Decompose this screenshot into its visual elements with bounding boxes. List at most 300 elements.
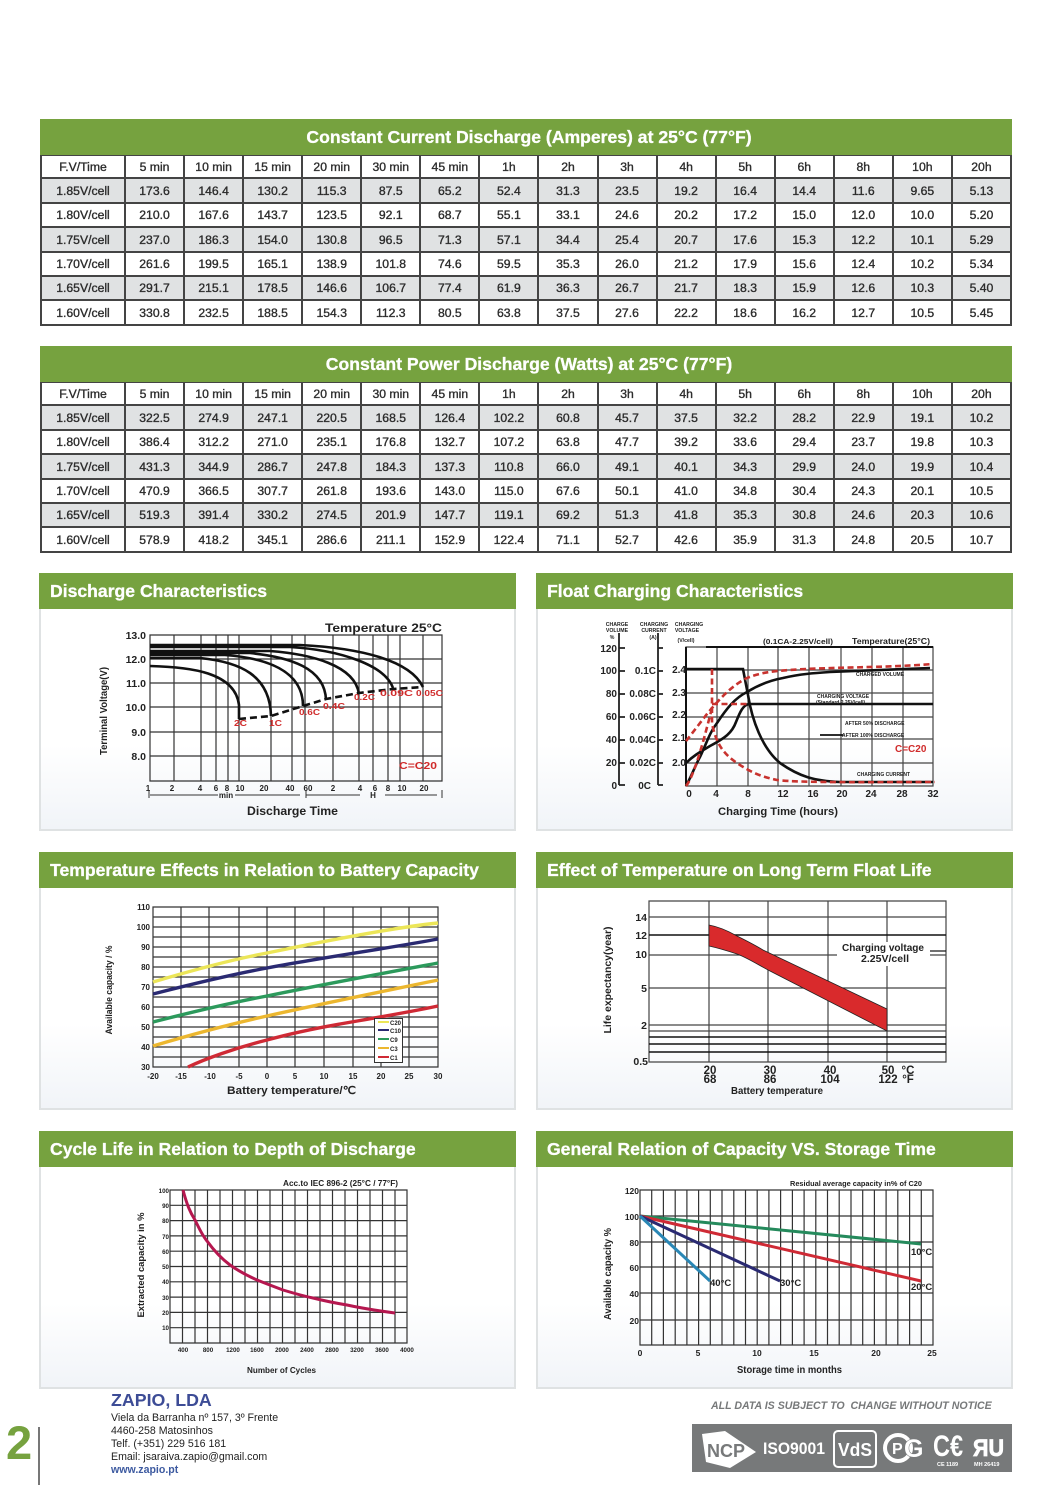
chart: capacity vs temperature: -20 xyxy=(147,1072,159,1081)
table: constant current discharge: 17.2 xyxy=(733,208,757,222)
table: constant current discharge: 15.0 xyxy=(792,208,816,222)
chart: float charging curves: 2.1 xyxy=(672,733,686,744)
heading: constant current discharge: Constant Current Discharge (Amperes) at 25°C (77°F) xyxy=(306,127,752,147)
logo: ISO9001: ISO9001 xyxy=(763,1439,825,1458)
table: constant current discharge xyxy=(40,155,1012,326)
table: constant power discharge: 40.1 xyxy=(674,460,698,474)
table: constant power discharge: 24.8 xyxy=(851,532,875,546)
table: constant current discharge: 8h xyxy=(856,160,870,174)
chart: float charging curves: 20 xyxy=(606,758,617,769)
chart: float charging curves: 24 xyxy=(865,789,877,800)
legend: C20 xyxy=(390,1021,402,1027)
chart: discharge curves: Terminal Voltage(V) xyxy=(99,667,110,755)
table: constant power discharge: 34.8 xyxy=(733,484,757,498)
table: constant power discharge: 143.0 xyxy=(435,484,465,498)
table: constant power discharge: 1.65V/cell xyxy=(56,508,110,522)
company contact block: Viela da Barranha nº 157, 3º Frente xyxy=(111,1412,278,1424)
chart: cycle life curve: 3200 xyxy=(350,1347,364,1354)
chart: capacity vs temperature: -10 xyxy=(204,1072,216,1081)
table: constant power discharge: 30.8 xyxy=(792,508,816,522)
chart: discharge curves: 2 xyxy=(331,784,336,793)
table: constant current discharge: 20h xyxy=(971,160,992,174)
table: constant power discharge: 23.7 xyxy=(851,435,875,449)
chart: float life vs temperature: 2.25V/cell xyxy=(861,953,909,965)
table: constant power discharge: 71.1 xyxy=(556,532,580,546)
table: constant power discharge: 1.75V/cell xyxy=(56,460,110,474)
chart: cycle life curve: Number of Cycles xyxy=(247,1365,316,1375)
table: constant current discharge: 165.1 xyxy=(257,257,288,271)
table: constant current discharge: 5 min xyxy=(140,160,169,174)
table: constant current discharge: 167.6 xyxy=(198,208,229,222)
table: constant power discharge: 3h xyxy=(620,386,634,400)
chart: discharge curves: 2C xyxy=(234,719,247,728)
chart: float charging curves: 0.08C xyxy=(629,689,656,700)
chart: discharge curves: 8.0 xyxy=(131,751,146,763)
table: constant current discharge: 14.4 xyxy=(792,184,816,198)
table: constant current discharge: 154.0 xyxy=(257,232,288,246)
table: constant power discharge: 193.6 xyxy=(376,484,406,498)
table: constant current discharge: 33.1 xyxy=(556,208,580,222)
table: constant current discharge: 20.2 xyxy=(674,208,698,222)
chart: discharge curves: 1 xyxy=(146,784,151,793)
table: constant power discharge: 10.7 xyxy=(970,532,993,546)
chart: storage time lines: 40 xyxy=(630,1289,639,1299)
table: constant power discharge: 322.5 xyxy=(139,410,170,424)
chart: float charging curves: 2.3 xyxy=(672,688,686,699)
chart: float life vs temperature: 2 xyxy=(641,1020,647,1032)
table: constant current discharge: 115.3 xyxy=(317,184,347,198)
chart: float charging curves: 80 xyxy=(606,689,617,700)
chart: capacity vs temperature: 90 xyxy=(141,943,151,952)
table: constant power discharge: 49.1 xyxy=(615,460,639,474)
chart: discharge curves: 20 xyxy=(260,784,269,793)
table: constant power discharge: 168.5 xyxy=(376,410,406,424)
chart: float life vs temperature: Life expectancy(year) xyxy=(602,926,614,1034)
chart: float charging curves: 2.0 xyxy=(672,758,686,769)
chart: float charging curves: (A) xyxy=(649,635,657,641)
chart: float life vs temperature: 122 xyxy=(878,1074,898,1086)
table: constant current discharge: 10h xyxy=(912,160,933,174)
table: constant power discharge: 39.2 xyxy=(674,435,698,449)
logo: VdS: VdS xyxy=(838,1440,872,1460)
chart: float charging curves: 0 xyxy=(611,781,617,792)
table: constant power discharge: 119.1 xyxy=(494,508,524,522)
table: constant power discharge: 1.85V/cell xyxy=(56,410,110,424)
table: constant current discharge: 17.6 xyxy=(733,232,757,246)
chart: storage time lines: 20 xyxy=(871,1348,881,1358)
chart: float charging curves: 2.4 xyxy=(672,665,686,676)
table: constant power discharge: 307.7 xyxy=(257,484,288,498)
legend: C3 xyxy=(390,1047,398,1053)
chart: float charging curves: 40 xyxy=(606,735,617,746)
table: constant current discharge: 10 min xyxy=(195,160,232,174)
chart: float charging curves: AFTER 100% DISCHARGE xyxy=(842,733,905,739)
table: constant power discharge: 6h xyxy=(797,386,811,400)
table: constant power discharge: 132.7 xyxy=(435,435,465,449)
chart: capacity vs temperature: 80 xyxy=(141,963,151,972)
table: constant current discharge: 1.60V/cell xyxy=(56,306,110,320)
panel: discharge characteristics xyxy=(39,573,516,831)
logo: PG xyxy=(885,1435,923,1463)
panel: capacity vs storage time: General Relation of Capacity VS. Storage Time xyxy=(547,1139,936,1159)
legend: C1 xyxy=(390,1056,398,1062)
chart: cycle life curve xyxy=(136,1179,414,1375)
chart: capacity vs temperature: 15 xyxy=(349,1072,358,1081)
panel: float life: Effect of Temperature on Long Term Float Life xyxy=(547,860,931,880)
table: constant power discharge: 35.3 xyxy=(733,508,757,522)
table: constant power discharge: 41.0 xyxy=(674,484,698,498)
chart: cycle life curve: 2800 xyxy=(325,1347,339,1354)
company contact block: Email: jsaraiva.zapio@gmail.com xyxy=(111,1451,267,1463)
table: constant current discharge: 74.6 xyxy=(438,257,462,271)
chart: discharge curves: 1C xyxy=(269,719,282,728)
table: constant current discharge: 4h xyxy=(679,160,693,174)
legend: C9 xyxy=(390,1038,398,1044)
chart: capacity vs temperature: 50 xyxy=(141,1023,151,1032)
certification logos strip xyxy=(692,1424,1012,1472)
table: constant power discharge: 10.5 xyxy=(970,484,993,498)
table: constant current discharge: 80.5 xyxy=(438,306,462,320)
table: constant power discharge: 50.1 xyxy=(615,484,639,498)
chart: capacity vs temperature: 30 xyxy=(141,1063,151,1072)
company contact block: www.zapio.pt xyxy=(111,1464,178,1476)
chart: capacity vs temperature: Battery temperature/℃ xyxy=(227,1085,356,1097)
chart: float charging curves: CHARGING xyxy=(675,622,703,628)
table: constant power discharge: 102.2 xyxy=(494,410,524,424)
table: constant power discharge: 5 min xyxy=(140,386,169,400)
table: constant power discharge: 34.3 xyxy=(733,460,757,474)
logo: CE: C€ xyxy=(933,1430,963,1463)
table: constant power discharge: 33.6 xyxy=(733,435,757,449)
table: constant current discharge: 146.4 xyxy=(198,184,229,198)
legend xyxy=(374,1018,402,1062)
chart: discharge curves: 10 xyxy=(398,784,407,793)
chart: float charging curves: (Standard 2.25V/cell) xyxy=(816,700,866,706)
table: constant power discharge: 51.3 xyxy=(615,508,639,522)
table: constant current discharge: 15.3 xyxy=(792,232,816,246)
table: constant power discharge: 271.0 xyxy=(257,435,288,449)
table: constant power discharge: 1.60V/cell xyxy=(56,532,110,546)
chart: float life vs temperature: 86 xyxy=(764,1074,776,1086)
chart: capacity vs temperature: 5 xyxy=(293,1072,298,1081)
table: constant current discharge: 199.5 xyxy=(198,257,229,271)
heading: constant power discharge xyxy=(40,346,1012,382)
panel: temperature effects: Temperature Effects in Relation to Battery Capacity xyxy=(50,860,479,880)
table: constant current discharge: 6h xyxy=(797,160,811,174)
table: constant power discharge: 24.0 xyxy=(851,460,875,474)
panel: discharge characteristics: Discharge Characteristics xyxy=(50,581,267,601)
table: constant power discharge: 274.5 xyxy=(316,508,347,522)
chart: cycle life curve: 4000 xyxy=(400,1347,414,1354)
table: constant power discharge: 184.3 xyxy=(376,460,406,474)
logo: PG: P xyxy=(892,1441,903,1458)
chart: storage time lines xyxy=(603,1179,937,1376)
table: constant power discharge: 20h xyxy=(971,386,992,400)
chart: discharge curves: Temperature 25°C xyxy=(325,621,442,635)
table: constant current discharge: 186.3 xyxy=(198,232,229,246)
chart: storage time lines: 20°C xyxy=(911,1282,932,1293)
chart: float life vs temperature: 104 xyxy=(820,1074,840,1086)
table: constant power discharge: 22.9 xyxy=(851,410,875,424)
chart: storage time lines: 10 xyxy=(752,1348,762,1358)
table: constant power discharge: 30 min xyxy=(372,386,409,400)
chart: cycle life curve: Acc.to IEC 896-2 (25°C / 77°F) xyxy=(283,1179,398,1188)
table: constant current discharge: 21.2 xyxy=(674,257,698,271)
table: constant current discharge: 237.0 xyxy=(139,232,170,246)
chart: float charging curves: VOLTAGE xyxy=(675,628,700,634)
table: constant power discharge: 1h xyxy=(502,386,516,400)
chart: storage time lines: 15 xyxy=(809,1348,819,1358)
panel: cycle life: Cycle Life in Relation to Depth of Discharge xyxy=(50,1139,416,1159)
table: constant power discharge: 42.6 xyxy=(674,532,698,546)
chart: float charging curves: AFTER 50% DISCHARGE xyxy=(845,721,905,727)
chart: discharge curves: 40 xyxy=(286,784,295,793)
table: constant power discharge: 20.5 xyxy=(910,532,934,546)
table: constant power discharge: 30.4 xyxy=(792,484,816,498)
table: constant current discharge: 291.7 xyxy=(139,281,170,295)
table: constant power discharge: 286.6 xyxy=(316,532,347,546)
table: constant power discharge: 107.2 xyxy=(494,435,524,449)
chart: float charging curves: 0.02C xyxy=(629,758,656,769)
chart: discharge curves: 10 xyxy=(236,784,245,793)
chart: float charging curves: (0.1CA-2.25V/cell) xyxy=(763,637,834,646)
chart: float charging curves: Charging Time (hours) xyxy=(718,806,838,818)
table: constant power discharge: 345.1 xyxy=(257,532,288,546)
table: constant current discharge: 12.0 xyxy=(851,208,875,222)
chart: float life vs temperature: 10 xyxy=(635,949,647,961)
table: constant power discharge: 28.2 xyxy=(792,410,816,424)
table: constant current discharge: 215.1 xyxy=(198,281,229,295)
table: constant current discharge: 143.7 xyxy=(257,208,288,222)
chart: float charging curves: 28 xyxy=(896,789,908,800)
chart: discharge curves: min xyxy=(219,791,233,800)
table: constant current discharge: 45 min xyxy=(432,160,468,174)
table: constant power discharge: 330.2 xyxy=(257,508,288,522)
table: constant current discharge: 1.80V/cell xyxy=(56,208,110,222)
company contact block xyxy=(111,1390,278,1476)
table: constant power discharge: 29.9 xyxy=(792,460,816,474)
table: constant power discharge: 211.1 xyxy=(376,532,406,546)
table: constant current discharge: 5h xyxy=(738,160,752,174)
chart: cycle life curve: 400 xyxy=(178,1347,189,1354)
chart: discharge curves: 0.09C xyxy=(380,689,413,698)
table: constant power discharge: 247.1 xyxy=(257,410,288,424)
table: constant current discharge: 57.1 xyxy=(497,232,521,246)
chart: discharge curves: H xyxy=(370,791,376,800)
table: constant power discharge: 20 min xyxy=(313,386,350,400)
chart: cycle life curve: 2000 xyxy=(275,1347,289,1354)
chart: capacity vs temperature: 70 xyxy=(141,983,151,992)
table: constant power discharge: 115.0 xyxy=(494,484,524,498)
table: constant power discharge: F.V/Time xyxy=(59,386,107,400)
table: constant current discharge: 12.2 xyxy=(851,232,875,246)
table: constant current discharge: 101.8 xyxy=(376,257,406,271)
table: constant current discharge: 18.3 xyxy=(733,281,757,295)
table: constant current discharge: 35.3 xyxy=(556,257,580,271)
table: constant current discharge: 59.5 xyxy=(497,257,521,271)
table: constant power discharge: 10 min xyxy=(195,386,232,400)
chart: storage time lines: 10°C xyxy=(911,1247,932,1258)
table: constant current discharge: 5.20 xyxy=(970,208,993,222)
chart: cycle life curve: 80 xyxy=(162,1218,170,1225)
chart: float charging curves: 4 xyxy=(713,789,719,800)
chart: float charging curves: 20 xyxy=(836,789,848,800)
chart: float charging curves: 2.2 xyxy=(672,710,686,721)
logo: CE: CE 1189 xyxy=(937,1462,958,1468)
table: constant current discharge: 52.4 xyxy=(497,184,521,198)
table: constant power discharge: 126.4 xyxy=(435,410,465,424)
table: constant current discharge: 188.5 xyxy=(257,306,288,320)
table: constant power discharge: 391.4 xyxy=(198,508,229,522)
table: constant power discharge: 10.2 xyxy=(970,410,993,424)
table: constant power discharge: 519.3 xyxy=(139,508,170,522)
chart: float charging curves: 0.1C xyxy=(635,666,656,677)
chart: float charging curves: CHARGING VOLTAGE xyxy=(817,694,870,700)
table: constant power discharge: 31.3 xyxy=(792,532,816,546)
chart: storage time lines: 30°C xyxy=(780,1278,801,1289)
table: constant current discharge: 68.7 xyxy=(438,208,462,222)
chart: discharge curves: 12.0 xyxy=(126,654,146,666)
table: constant current discharge: 130.8 xyxy=(316,232,347,246)
table: constant current discharge: 20 min xyxy=(313,160,350,174)
chart: storage time lines: Residual average capacity in% of C20 xyxy=(790,1179,922,1188)
table: constant current discharge: 17.9 xyxy=(733,257,757,271)
table: constant current discharge: 123.5 xyxy=(316,208,347,222)
table: constant power discharge: 5h xyxy=(738,386,752,400)
table: constant power discharge: 366.5 xyxy=(198,484,229,498)
table: constant current discharge: 55.1 xyxy=(497,208,521,222)
table: constant current discharge: 1.75V/cell xyxy=(56,232,110,246)
chart: storage time lines: Available capacity % xyxy=(603,1228,614,1320)
chart: float life vs temperature: °C xyxy=(902,1065,914,1077)
chart: float charging curves: 100 xyxy=(600,666,617,677)
panel: float charging characteristics: Float Charging Characteristics xyxy=(547,581,803,601)
panel: cycle life xyxy=(39,1131,516,1389)
table: constant power discharge: 2h xyxy=(561,386,575,400)
table: constant current discharge: 5.34 xyxy=(970,257,993,271)
chart: capacity vs temperature: 0 xyxy=(265,1072,270,1081)
chart: float life vs temperature: 0.5 xyxy=(633,1056,648,1068)
table: constant current discharge: 87.5 xyxy=(379,184,403,198)
chart: discharge curves: C=C20 xyxy=(399,760,437,772)
chart: storage time lines: 80 xyxy=(630,1238,639,1248)
chart: float charging curves: CHARGING xyxy=(640,622,668,628)
table: constant current discharge: F.V/Time xyxy=(59,160,107,174)
chart: float charging curves: C=C20 xyxy=(895,744,927,755)
table: constant current discharge: 12.7 xyxy=(851,306,875,320)
chart: discharge curves: 10.0 xyxy=(126,702,146,714)
table: constant current discharge: 37.5 xyxy=(556,306,580,320)
chart: capacity vs temperature: 40 xyxy=(141,1043,151,1052)
table: constant power discharge: 37.5 xyxy=(674,410,698,424)
table: constant current discharge: 330.8 xyxy=(139,306,170,320)
chart: capacity vs temperature: -15 xyxy=(175,1072,187,1081)
table: constant power discharge: 4h xyxy=(679,386,693,400)
table: constant current discharge: 26.0 xyxy=(615,257,639,271)
chart: discharge curves: 20 xyxy=(420,784,429,793)
chart: cycle life curve: 2400 xyxy=(300,1347,314,1354)
table: constant power discharge: 19.9 xyxy=(910,460,934,474)
chart: storage time lines: 5 xyxy=(696,1348,701,1358)
logo: NCP: NCP xyxy=(707,1441,745,1461)
logo: UR: MH 26419 xyxy=(974,1462,999,1468)
chart: cycle life curve: 10 xyxy=(162,1325,170,1332)
chart: cycle life curve: 100 xyxy=(159,1188,170,1195)
table: constant power discharge: 201.9 xyxy=(376,508,406,522)
table: constant current discharge: 92.1 xyxy=(379,208,403,222)
table: constant power discharge: 10.6 xyxy=(970,508,993,522)
heading: constant power discharge: Constant Power Discharge (Watts) at 25°C (77°F) xyxy=(326,354,732,374)
chart: cycle life curve: 60 xyxy=(162,1249,170,1256)
table: constant power discharge: 110.8 xyxy=(494,460,524,474)
chart: discharge curves: 0.2C xyxy=(354,693,375,702)
chart: float life vs temperature: 5 xyxy=(641,983,647,995)
chart: discharge curves: 0.6C xyxy=(299,708,320,717)
chart: cycle life curve: 800 xyxy=(203,1347,214,1354)
chart: float charging curves: CHARGING CURRENT xyxy=(857,772,910,778)
table: constant power discharge: 312.2 xyxy=(198,435,229,449)
chart: cycle life curve: 3600 xyxy=(375,1347,389,1354)
chart: float charging curves: CHARGED VOLUME xyxy=(856,672,905,678)
table: constant current discharge: 15 min xyxy=(254,160,291,174)
chart: storage time lines: 40°C xyxy=(710,1278,731,1289)
table: constant current discharge: 130.2 xyxy=(257,184,288,198)
chart: storage time lines: 0 xyxy=(638,1348,643,1358)
table: constant current discharge: 173.6 xyxy=(139,184,170,198)
table: constant current discharge: 20.7 xyxy=(674,232,698,246)
table: constant current discharge: 1.85V/cell xyxy=(56,184,110,198)
chart: float life vs temperature: 20 xyxy=(704,1065,716,1077)
table: constant power discharge: 8h xyxy=(856,386,870,400)
chart: storage time lines: 120 xyxy=(625,1186,639,1196)
table: constant current discharge: 12.4 xyxy=(851,257,875,271)
panel: temperature effects xyxy=(39,852,516,1110)
table: constant current discharge: 11.6 xyxy=(852,184,875,198)
logo: VdS xyxy=(834,1431,876,1467)
chart: discharge curves xyxy=(99,621,443,818)
table: constant current discharge: 261.6 xyxy=(139,257,170,271)
table: constant current discharge: 5.29 xyxy=(970,232,993,246)
table: constant current discharge: 24.6 xyxy=(615,208,639,222)
table: constant power discharge: 10.3 xyxy=(970,435,993,449)
table: constant current discharge: 232.5 xyxy=(198,306,229,320)
table: constant current discharge: 10.3 xyxy=(910,281,934,295)
table: constant current discharge: 31.3 xyxy=(556,184,580,198)
chart: capacity vs temperature: -5 xyxy=(235,1072,243,1081)
chart: float life vs temperature: 12 xyxy=(635,930,647,942)
table: constant power discharge: 32.2 xyxy=(733,410,757,424)
table: constant power discharge: 386.4 xyxy=(139,435,170,449)
table: constant current discharge: 71.3 xyxy=(438,232,462,246)
chart: cycle life curve: 30 xyxy=(162,1295,170,1302)
table: constant current discharge: 23.5 xyxy=(615,184,639,198)
chart: float charging curves: % xyxy=(610,635,615,641)
table: constant power discharge: 220.5 xyxy=(316,410,347,424)
company contact block: ZAPIO, LDA xyxy=(111,1390,212,1410)
chart: discharge curves: 13.0 xyxy=(126,630,146,642)
company contact block: Telf. (+351) 229 516 181 xyxy=(111,1438,226,1450)
chart: cycle life curve: 40 xyxy=(162,1279,170,1286)
table: constant power discharge: 45.7 xyxy=(615,410,639,424)
table: constant power discharge: 247.8 xyxy=(316,460,347,474)
table: constant power discharge: 15 min xyxy=(254,386,291,400)
chart: discharge curves: 0.4C xyxy=(323,702,345,711)
table: constant power discharge: 35.9 xyxy=(733,532,757,546)
chart: cycle life curve: 1200 xyxy=(226,1347,240,1354)
table: constant current discharge: 19.2 xyxy=(674,184,698,198)
chart: storage time lines: 60 xyxy=(630,1263,639,1273)
table: constant power discharge: 29.4 xyxy=(792,435,816,449)
